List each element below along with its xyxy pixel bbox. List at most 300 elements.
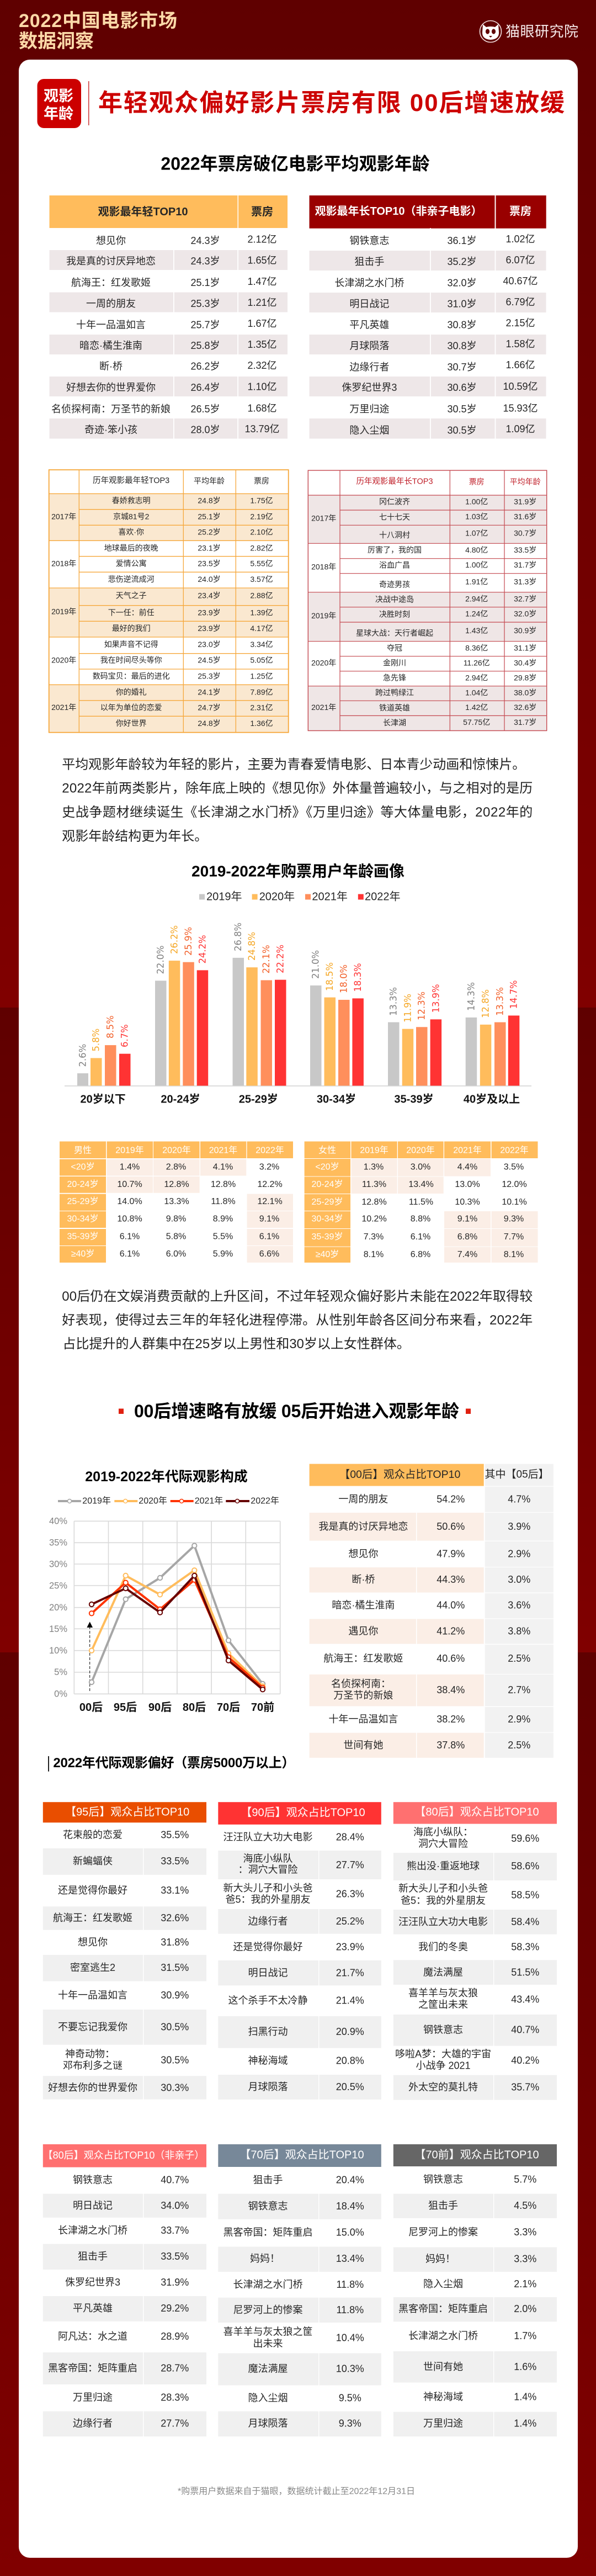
data labels: 2019: 21.0% bbox=[310, 950, 321, 979]
table: youngest TOP10: 1.35亿 bbox=[247, 339, 277, 350]
table: 70s TOP10: 9.5% bbox=[339, 2393, 361, 2404]
table: 80s TOP10: 40.7% bbox=[511, 2024, 539, 2036]
table: 90s TOP10: 26.3% bbox=[336, 1889, 364, 1900]
table: male age share: 5.8% bbox=[166, 1232, 186, 1241]
male row labels: ≥40岁 bbox=[71, 1249, 94, 1259]
header 70s: 【70后】观众占比TOP10 bbox=[240, 2149, 364, 2161]
table: yearly oldest TOP3: 奇迹男孩 bbox=[379, 580, 410, 589]
arrow: post-00s rise bbox=[87, 1622, 93, 1691]
table: male age share: 6.1% bbox=[120, 1249, 140, 1259]
table header bbox=[50, 195, 288, 228]
table: oldest TOP10: 30.5岁 bbox=[447, 425, 477, 436]
table: post-00s TOP10: 41.2% bbox=[437, 1626, 465, 1637]
table: 80s non-family TOP10: 31.9% bbox=[161, 2277, 189, 2288]
table: 80s TOP10: 熊出没·重返地球 bbox=[407, 1861, 480, 1872]
table: yearly youngest TOP3: 2020年 bbox=[51, 656, 76, 665]
table: youngest TOP10: 25.1岁 bbox=[190, 277, 220, 288]
data labels: 2019: 22.0% bbox=[156, 945, 166, 974]
table: 70s TOP10: 妈妈！ bbox=[250, 2253, 280, 2264]
table: youngest TOP10: 25.8岁 bbox=[190, 340, 220, 351]
table: pre-70s TOP10: 1.7% bbox=[514, 2330, 536, 2341]
table: 95s TOP10: 花束般的恋爱 bbox=[63, 1828, 123, 1841]
data labels: 2021: 18.0% bbox=[339, 964, 349, 993]
table: female age share: 13.0% bbox=[455, 1180, 480, 1189]
value axis labels: 0% bbox=[54, 1689, 67, 1699]
generation axis labels: 95后 bbox=[114, 1701, 137, 1714]
table: yearly oldest TOP3: 31.7岁 bbox=[514, 560, 536, 569]
female row labels: 35-39岁 bbox=[312, 1232, 343, 1242]
table: oldest TOP10: 平凡英雄 bbox=[349, 319, 389, 330]
table: 95s TOP10: 33.5% bbox=[161, 1856, 189, 1867]
table: oldest TOP10: 钢铁意志 bbox=[349, 235, 389, 246]
table: post-00s TOP10: 54.2% bbox=[437, 1493, 465, 1504]
table: yearly youngest TOP3: 春娇救志明 bbox=[112, 496, 151, 505]
table: yearly oldest TOP3: 厉害了，我的国 bbox=[368, 545, 422, 554]
data labels: 2021: 22.1% bbox=[261, 945, 272, 974]
table: yearly oldest TOP3: 1.43亿 bbox=[465, 626, 488, 635]
table: 80s TOP10: 58.5% bbox=[511, 1889, 539, 1900]
table: 80s TOP10: 51.5% bbox=[511, 1967, 539, 1978]
table: female age share: 11.5% bbox=[409, 1197, 433, 1207]
table: 95s TOP10: 35.5% bbox=[161, 1830, 189, 1841]
table: youngest TOP10: 25.3岁 bbox=[190, 298, 220, 309]
table: oldest TOP10: 隐入尘烟 bbox=[349, 425, 389, 436]
table: 80s non-family TOP10: 明日战记 bbox=[73, 2200, 113, 2211]
data labels: 2019: 26.8% bbox=[233, 923, 243, 951]
table: male age share: 10.8% bbox=[117, 1215, 142, 1223]
table: yearly oldest TOP3: 决战中途岛 bbox=[375, 595, 414, 603]
table: 95s TOP10: 31.5% bbox=[161, 1962, 189, 1973]
table: 95s TOP10: 邓布利多之谜 bbox=[63, 2060, 123, 2071]
table: female age share: 10.1% bbox=[502, 1197, 527, 1207]
table: 90s TOP10: 神秘海域 bbox=[248, 2055, 288, 2066]
table: 80s TOP10: 58.4% bbox=[511, 1916, 539, 1927]
data labels: 2019: 13.3% bbox=[389, 987, 398, 1016]
table: 70s TOP10: 11.8% bbox=[336, 2279, 364, 2290]
table: female age share: 3.5% bbox=[504, 1163, 524, 1172]
generation axis labels: 70前 bbox=[251, 1701, 274, 1714]
table: male age share: 6.1% bbox=[120, 1232, 140, 1241]
table: youngest TOP10: 26.2岁 bbox=[190, 361, 220, 372]
table: male age share: 10.7% bbox=[117, 1180, 142, 1189]
table: female age share: 7.3% bbox=[364, 1232, 384, 1242]
female table header bbox=[305, 1142, 538, 1158]
series 2019 bbox=[89, 1544, 265, 1686]
table: female age share: 8.8% bbox=[411, 1215, 430, 1223]
table: oldest TOP10: 长津湖之水门桥 bbox=[334, 278, 404, 289]
table: 80s TOP10 bbox=[393, 1802, 557, 2100]
generation axis labels: 70后 bbox=[217, 1701, 240, 1714]
table: youngest TOP10: 我是真的讨厌异地恋 bbox=[66, 255, 156, 267]
table: oldest TOP10: 10.59亿 bbox=[503, 381, 538, 392]
table: female age share: 8.1% bbox=[364, 1250, 384, 1259]
table: yearly oldest TOP3: 31.6岁 bbox=[514, 512, 536, 521]
table: 80s TOP10: 哆啦A梦：大雄的宇宙 bbox=[395, 2049, 491, 2060]
table: female age share: 7.7% bbox=[504, 1232, 524, 1242]
line chart legend: 2022年 bbox=[251, 1496, 279, 1506]
paragraph: age structure: 观影年龄结构更为年长。 bbox=[62, 829, 207, 844]
category axis labels: 20-24岁 bbox=[161, 1093, 200, 1106]
table: yearly youngest TOP3: 23.1岁 bbox=[198, 543, 221, 552]
table: yearly oldest TOP3: 急先锋 bbox=[383, 673, 406, 682]
badge: 观影年龄: 年龄 bbox=[44, 105, 73, 122]
table: yearly youngest TOP3 bbox=[49, 470, 289, 733]
table: youngest TOP10: 2.12亿 bbox=[247, 234, 277, 245]
table: 95s TOP10: 想见你 bbox=[78, 1937, 108, 1948]
table: yearly youngest TOP3: 票房 bbox=[254, 476, 269, 485]
table: oldest TOP10: 32.0岁 bbox=[447, 278, 477, 289]
table: pre-70s TOP10: 2.0% bbox=[514, 2303, 536, 2314]
data labels: 2022 bbox=[119, 935, 519, 1047]
table: male age share: 8.9% bbox=[213, 1215, 233, 1223]
data labels: 2019: 2.6% bbox=[77, 1044, 88, 1067]
table: yearly youngest TOP3: 2019年 bbox=[51, 607, 76, 616]
chart legend: 2019年 bbox=[206, 891, 242, 903]
header 95s: 【95后】观众占比TOP10 bbox=[65, 1806, 189, 1819]
table: 90s TOP10: 27.7% bbox=[336, 1859, 364, 1870]
series 2022 bbox=[89, 1573, 265, 1692]
table: yearly youngest TOP3: 你的婚礼 bbox=[116, 687, 147, 696]
table: post-00s TOP10: 2.9% bbox=[508, 1548, 530, 1559]
data labels: 2020: 18.5% bbox=[324, 962, 335, 991]
paragraph: post-00s trend: 00后仍在文娱消费贡献的上升区间，不过年轻观众偏好影片未能在2022年取得较 bbox=[62, 1289, 533, 1304]
table: youngest TOP10: 暗恋·橘生淮南 bbox=[79, 340, 142, 351]
line chart legend: 2020年 bbox=[139, 1496, 167, 1506]
table: 90s TOP10: ：洞穴大冒险 bbox=[238, 1864, 298, 1875]
table header: 其中【05后】 bbox=[485, 1469, 549, 1481]
table: 80s TOP10: 新大头儿子和小头爸 bbox=[398, 1883, 488, 1894]
table: oldest TOP10: 1.66亿 bbox=[505, 359, 535, 370]
table: oldest TOP10: 31.0岁 bbox=[447, 299, 477, 310]
table: post-00s TOP10: 50.6% bbox=[437, 1521, 465, 1532]
table: yearly oldest TOP3: 4.80亿 bbox=[465, 545, 488, 554]
table: 80s non-family TOP10: 28.9% bbox=[161, 2331, 189, 2342]
table: 80s non-family TOP10: 狙击手 bbox=[78, 2251, 108, 2262]
table: yearly oldest TOP3: 2.94亿 bbox=[465, 673, 488, 682]
table: female age share: 7.4% bbox=[457, 1250, 477, 1259]
paragraph: age structure: 史战争题材继续诞生《长津湖之水门桥》《万里归途》等大体量电影，2022年的 bbox=[62, 805, 533, 820]
table: yearly youngest TOP3: 平均年龄 bbox=[194, 476, 225, 485]
table header: 观影最年长TOP10（非亲子电影） bbox=[315, 205, 482, 218]
female table header: 2022年 bbox=[500, 1145, 529, 1155]
table: pre-70s TOP10: 隐入尘烟 bbox=[423, 2278, 463, 2289]
table: yearly oldest TOP3: 2019年 bbox=[311, 611, 336, 620]
table: yearly youngest TOP3: 2.88亿 bbox=[250, 591, 273, 600]
table: post-00s TOP10: 我是真的讨厌异地恋 bbox=[318, 1520, 408, 1532]
table: post-00s TOP10: 3.0% bbox=[508, 1574, 530, 1585]
table: 70s TOP10: 隐入尘烟 bbox=[248, 2393, 288, 2404]
data labels: 2019 bbox=[77, 923, 477, 1067]
table header: 观影最年轻TOP10 bbox=[98, 205, 188, 218]
table: yearly youngest TOP3: 1.36亿 bbox=[250, 719, 273, 728]
bars: 2022 bbox=[119, 970, 519, 1086]
table header: 票房 bbox=[509, 205, 531, 218]
table: 70s TOP10: 狙击手 bbox=[253, 2175, 283, 2186]
table: male age share: 12.2% bbox=[257, 1180, 283, 1189]
table: pre-70s TOP10: 世间有她 bbox=[423, 2361, 463, 2372]
value axis labels: 15% bbox=[49, 1624, 67, 1634]
table: male age share: 12.8% bbox=[164, 1180, 189, 1189]
table: youngest TOP10: 断·桥 bbox=[99, 361, 123, 372]
table: yearly oldest TOP3: 1.04亿 bbox=[465, 688, 488, 697]
chart legend: 2022年 bbox=[365, 891, 401, 903]
female table header: 2020年 bbox=[406, 1145, 435, 1155]
header 80s non-family: 【80后】观众占比TOP10（非亲子） bbox=[43, 2150, 204, 2161]
table: oldest TOP10: 35.2岁 bbox=[447, 256, 477, 267]
table: 95s TOP10: 航海王：红发歌姬 bbox=[53, 1912, 132, 1923]
table: yearly oldest TOP3: 33.5岁 bbox=[514, 545, 536, 554]
table: yearly oldest TOP3: 2.94亿 bbox=[465, 594, 488, 603]
female row labels: 30-34岁 bbox=[312, 1213, 343, 1223]
table: yearly oldest TOP3 bbox=[308, 470, 547, 731]
table: female age share: 6.1% bbox=[411, 1232, 430, 1242]
table: 90s TOP10: 边缘行者 bbox=[248, 1916, 288, 1927]
table: youngest TOP10: 24.3岁 bbox=[190, 256, 220, 267]
table: yearly oldest TOP3: 票房 bbox=[469, 477, 485, 486]
table: yearly youngest TOP3: 下一任：前任 bbox=[108, 608, 155, 617]
table: 90s TOP10: 20.5% bbox=[336, 2081, 364, 2092]
table: oldest TOP10: 30.6岁 bbox=[447, 382, 477, 393]
table: yearly oldest TOP3: 32.0岁 bbox=[514, 609, 536, 618]
table: youngest TOP10: 1.47亿 bbox=[247, 276, 277, 287]
table: 95s TOP10: 十年一品温如言 bbox=[58, 1990, 127, 2001]
table: post-00s TOP10: 44.0% bbox=[437, 1600, 465, 1611]
line chart legend bbox=[58, 1496, 279, 1506]
table: youngest TOP10: 1.68亿 bbox=[247, 402, 277, 414]
table: post-00s TOP10: 2.9% bbox=[508, 1714, 530, 1725]
table: pre-70s TOP10 bbox=[393, 2144, 557, 2437]
table: youngest TOP10: 26.5岁 bbox=[190, 404, 220, 415]
table: 80s TOP10: 钢铁意志 bbox=[423, 2024, 463, 2036]
table: post-00s TOP10: 3.9% bbox=[508, 1521, 530, 1532]
table: 90s TOP10: 海底小纵队 bbox=[243, 1853, 292, 1864]
table: 80s non-family TOP10: 长津湖之水门桥 bbox=[58, 2225, 127, 2236]
table: 80s TOP10: 小战争 2021 bbox=[416, 2060, 471, 2071]
table: yearly youngest TOP3: 4.17亿 bbox=[250, 624, 273, 633]
table: 95s TOP10: 30.5% bbox=[161, 2055, 189, 2066]
table: male age share: 9.1% bbox=[259, 1215, 279, 1223]
table: yearly youngest TOP3: 24.7岁 bbox=[198, 703, 221, 712]
table: 80s non-family TOP10: 黑客帝国：矩阵重启 bbox=[48, 2363, 137, 2374]
table: yearly youngest TOP3: 数码宝贝：最后的进化 bbox=[93, 671, 170, 680]
table: yearly youngest TOP3: 天气之子 bbox=[116, 591, 147, 600]
table: post-00s TOP10: 暗恋·橘生淮南 bbox=[332, 1599, 395, 1611]
table: 90s TOP10: 23.9% bbox=[336, 1941, 364, 1952]
table: yearly oldest TOP3: 2020年 bbox=[311, 659, 336, 667]
table: pre-70s TOP10: 长津湖之水门桥 bbox=[408, 2330, 478, 2341]
table: yearly youngest TOP3: 5.05亿 bbox=[250, 656, 273, 665]
table: yearly oldest TOP3: 2017年 bbox=[311, 513, 336, 522]
table: 90s TOP10 bbox=[218, 1802, 381, 2100]
table: oldest TOP10: 边缘行者 bbox=[349, 362, 389, 373]
data labels: 2021: 13.3% bbox=[494, 987, 505, 1016]
table: yearly youngest TOP3: 2018年 bbox=[51, 559, 76, 568]
table: post-00s TOP10: 断·桥 bbox=[352, 1574, 375, 1585]
table: yearly youngest TOP3: 24.8岁 bbox=[198, 719, 221, 728]
table: 95s TOP10: 还是觉得你最好 bbox=[58, 1885, 127, 1896]
table: 90s TOP10: 还是觉得你最好 bbox=[233, 1941, 302, 1952]
table: 80s non-family TOP10 bbox=[43, 2144, 206, 2437]
table: 70s TOP10: 20.4% bbox=[336, 2175, 364, 2186]
table: male age share: 5.5% bbox=[213, 1232, 233, 1241]
table: pre-70s TOP10: 5.7% bbox=[514, 2174, 536, 2185]
table: 80s TOP10: 魔法满屋 bbox=[423, 1967, 463, 1978]
table: 70s TOP10: 18.4% bbox=[336, 2201, 364, 2212]
chart legend: 2020年 bbox=[259, 891, 295, 903]
table: 70s TOP10: 月球陨落 bbox=[248, 2418, 288, 2429]
female row labels bbox=[305, 1159, 350, 1263]
table: oldest TOP10: 1.02亿 bbox=[505, 234, 535, 245]
generation axis labels bbox=[79, 1701, 274, 1714]
female row labels: <20岁 bbox=[315, 1162, 339, 1172]
icon: cat logo bbox=[480, 21, 501, 42]
table: 80s TOP10: 40.2% bbox=[511, 2055, 539, 2066]
table: yearly oldest TOP3: 冈仁波齐 bbox=[379, 497, 410, 506]
paragraph: age structure bbox=[62, 757, 533, 844]
table: 90s TOP10: 20.9% bbox=[336, 2026, 364, 2037]
table: post-00s TOP10: 4.7% bbox=[508, 1493, 530, 1504]
male row labels bbox=[60, 1159, 106, 1263]
table: 70s TOP10: 黑客帝国：矩阵重启 bbox=[223, 2227, 312, 2238]
table: post-00s TOP10 bbox=[310, 1464, 554, 1758]
bars: 2020 bbox=[91, 961, 491, 1086]
value axis labels: 25% bbox=[49, 1581, 67, 1591]
table: yearly oldest TOP3: 1.03亿 bbox=[465, 512, 488, 521]
value axis labels: 35% bbox=[49, 1538, 67, 1548]
table: 80s TOP10: 58.6% bbox=[511, 1861, 539, 1872]
table: 70s TOP10: 15.0% bbox=[336, 2227, 364, 2238]
table: 70s TOP10: 尼罗河上的惨案 bbox=[233, 2304, 302, 2315]
table: female age share bbox=[305, 1142, 538, 1263]
table: post-00s TOP10: 世间有她 bbox=[343, 1740, 383, 1751]
table: 70s TOP10: 13.4% bbox=[336, 2253, 364, 2264]
table: oldest TOP10: 40.67亿 bbox=[503, 275, 538, 287]
table: oldest TOP10: 1.09亿 bbox=[505, 423, 535, 434]
table: yearly oldest TOP3: 31.3岁 bbox=[514, 577, 536, 586]
table: yearly oldest TOP3: 8.36亿 bbox=[465, 643, 488, 652]
data labels: 2021: 12.3% bbox=[416, 992, 427, 1020]
table: yearly oldest TOP3: 1.00亿 bbox=[465, 497, 488, 506]
table: yearly youngest TOP3: 悲伤逆流成河 bbox=[108, 575, 155, 584]
table: 95s TOP10: 不要忘记我爱你 bbox=[58, 2022, 127, 2033]
value axis labels bbox=[49, 1516, 67, 1699]
table: male age share: 3.2% bbox=[259, 1163, 279, 1172]
male table header: 2022年 bbox=[256, 1145, 284, 1155]
category axis labels: 20岁以下 bbox=[80, 1093, 126, 1106]
header 95s bbox=[43, 1802, 206, 1822]
data labels: 2022: 18.3% bbox=[353, 963, 363, 992]
table: yearly youngest TOP3: 25.1岁 bbox=[198, 512, 221, 521]
table: post-00s TOP10: 遇见你 bbox=[348, 1626, 378, 1637]
table: yearly youngest TOP3: 历年观影最年轻TOP3 bbox=[93, 476, 169, 485]
table: yearly youngest TOP3: 23.4岁 bbox=[198, 591, 221, 600]
female row labels: ≥40岁 bbox=[316, 1249, 339, 1259]
data labels: 2022: 13.9% bbox=[430, 984, 441, 1013]
table: oldest TOP10: 30.7岁 bbox=[447, 362, 477, 373]
table: yearly oldest TOP3: 32.7岁 bbox=[514, 594, 536, 603]
table: yearly youngest TOP3: 我在时间尽头等你 bbox=[100, 656, 162, 665]
table: yearly oldest TOP3: 夺冠 bbox=[387, 643, 402, 652]
table: yearly oldest TOP3: 金刚川 bbox=[383, 659, 406, 667]
table: male age share: 14.0% bbox=[117, 1197, 142, 1206]
table: pre-70s TOP10: 黑客帝国：矩阵重启 bbox=[398, 2303, 488, 2314]
table: 70s TOP10: 长津湖之水门桥 bbox=[233, 2279, 302, 2290]
table: post-00s TOP10: 3.6% bbox=[508, 1600, 530, 1611]
table: yearly oldest TOP3: 11.26亿 bbox=[464, 659, 490, 667]
chart legend bbox=[199, 891, 401, 903]
data labels: 2021: 8.5% bbox=[105, 1015, 116, 1038]
table: female age share: 6.8% bbox=[411, 1250, 430, 1259]
table: youngest TOP10: 13.79亿 bbox=[244, 423, 280, 434]
category axis labels bbox=[80, 1093, 520, 1106]
table: oldest TOP10: 6.07亿 bbox=[505, 255, 535, 266]
table: 70s TOP10: 魔法满屋 bbox=[248, 2363, 288, 2374]
data labels: 2021: 25.9% bbox=[183, 927, 194, 956]
table: post-00s TOP10: 想见你 bbox=[348, 1548, 378, 1559]
table: pre-70s TOP10: 神秘海域 bbox=[423, 2392, 463, 2403]
table: yearly youngest TOP3: 2.31亿 bbox=[250, 703, 273, 712]
table: male age share: 9.8% bbox=[166, 1215, 186, 1223]
table: yearly youngest TOP3: 2.10亿 bbox=[250, 528, 273, 537]
table: 90s TOP10: 月球陨落 bbox=[248, 2081, 288, 2092]
table: yearly oldest TOP3: 30.7岁 bbox=[514, 528, 536, 537]
table: youngest TOP10: 26.4岁 bbox=[190, 382, 220, 393]
table: yearly youngest TOP3: 1.25亿 bbox=[250, 671, 273, 680]
logo text: 猫眼研究院 bbox=[505, 23, 578, 40]
table: female age share: 12.8% bbox=[361, 1197, 387, 1207]
table: oldest TOP10: 30.5岁 bbox=[447, 404, 477, 415]
table: oldest TOP10: 15.93亿 bbox=[503, 402, 538, 414]
table: yearly youngest TOP3: 地球最后的夜晚 bbox=[104, 543, 158, 552]
table: yearly youngest TOP3: 24.0岁 bbox=[198, 575, 221, 584]
table: pre-70s TOP10: 尼罗河上的惨案 bbox=[408, 2227, 478, 2238]
table: post-00s TOP10: 2.7% bbox=[508, 1684, 530, 1695]
table: yearly youngest TOP3: 24.5岁 bbox=[198, 656, 221, 665]
table: male age share: 1.4% bbox=[120, 1163, 140, 1172]
table: 80s non-family TOP10: 33.7% bbox=[161, 2225, 189, 2236]
table: post-00s TOP10: 一周的朋友 bbox=[338, 1493, 388, 1504]
table: male age share: 5.9% bbox=[213, 1249, 233, 1259]
table: 70s TOP10: 9.3% bbox=[339, 2418, 361, 2429]
table: yearly youngest TOP3: 3.57亿 bbox=[250, 575, 273, 584]
table: yearly youngest TOP3: 如果声音不记得 bbox=[104, 640, 158, 649]
table: female age share: 12.0% bbox=[502, 1180, 527, 1189]
table: 90s TOP10: 汪汪队立大功大电影 bbox=[223, 1831, 312, 1842]
line chart legend: 2019年 bbox=[82, 1496, 111, 1506]
value axis labels: 30% bbox=[49, 1559, 67, 1569]
table header bbox=[310, 1464, 554, 1486]
table: 80s TOP10: 爸5：我的外星朋友 bbox=[401, 1895, 486, 1906]
table: yearly youngest TOP3: 23.9岁 bbox=[198, 624, 221, 633]
table: 80s non-family TOP10: 边缘行者 bbox=[73, 2418, 113, 2429]
table: 80s TOP10: 59.6% bbox=[511, 1833, 539, 1844]
table: yearly youngest TOP3: 最好的我们 bbox=[112, 624, 151, 633]
table: yearly oldest TOP3: 38.0岁 bbox=[514, 688, 536, 697]
table: 80s non-family TOP10: 28.7% bbox=[161, 2363, 189, 2374]
table: 70s TOP10: 10.4% bbox=[336, 2332, 364, 2343]
table: 70s TOP10: 钢铁意志 bbox=[248, 2201, 288, 2212]
subheading: generation preferences: 2022年代际观影偏好（票房5000万以上） bbox=[53, 1756, 295, 1771]
table: 95s TOP10: 31.8% bbox=[161, 1937, 189, 1948]
category axis labels: 25-29岁 bbox=[239, 1093, 278, 1106]
table: oldest TOP10: 狙击手 bbox=[354, 256, 384, 267]
table: yearly youngest TOP3: 25.3岁 bbox=[198, 671, 221, 680]
table: yearly oldest TOP3: 32.6岁 bbox=[514, 703, 536, 712]
section heading: average age: 2022年票房破亿电影平均观影年龄 bbox=[161, 153, 430, 173]
table: male age share: 12.1% bbox=[257, 1197, 283, 1206]
line chart: generation composition bbox=[49, 1469, 280, 1714]
table: male age share: 6.6% bbox=[259, 1249, 279, 1259]
